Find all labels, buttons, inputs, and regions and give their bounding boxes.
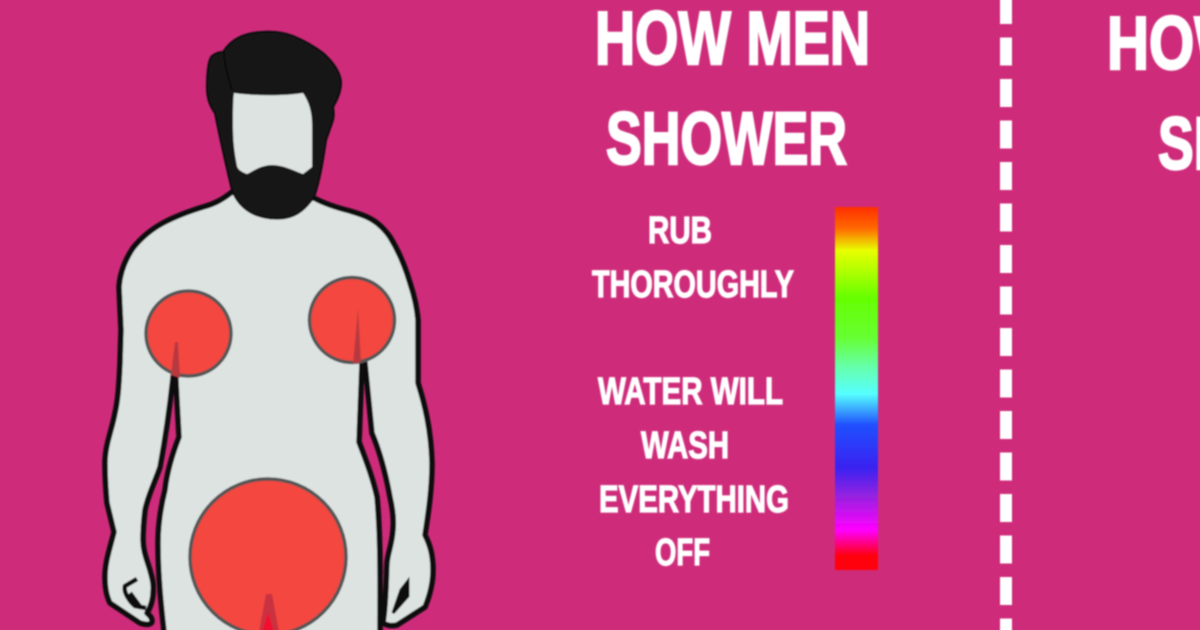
face xyxy=(233,93,312,174)
left hand thumb xyxy=(125,579,146,608)
label: water will wash everything off: OFF xyxy=(655,532,710,574)
label: rub thoroughly xyxy=(592,210,794,306)
rainbow intensity scale xyxy=(835,207,878,570)
heading: second column, cropped xyxy=(1107,1,1200,185)
figure: man xyxy=(105,32,433,630)
label: rub thoroughly: THOROUGHLY xyxy=(592,264,794,306)
hair and beard xyxy=(207,32,341,219)
left chest highlight xyxy=(146,291,231,378)
label: rub thoroughly: RUB xyxy=(648,210,712,252)
label: water will wash everything off: WATER WILL xyxy=(598,371,783,413)
heading: how men shower: SHOWER xyxy=(606,97,847,180)
label: water will wash everything off: EVERYTHING xyxy=(599,479,789,521)
label: water will wash everything off xyxy=(598,371,789,574)
label: water will wash everything off: WASH xyxy=(641,425,729,467)
heading: how men shower xyxy=(595,0,870,180)
hair parting line xyxy=(224,52,232,90)
right hand thumb xyxy=(393,581,408,613)
right chest highlight xyxy=(310,278,394,364)
dashed divider xyxy=(1000,0,1012,630)
lower body highlight xyxy=(190,479,346,630)
body silhouette xyxy=(105,192,433,630)
